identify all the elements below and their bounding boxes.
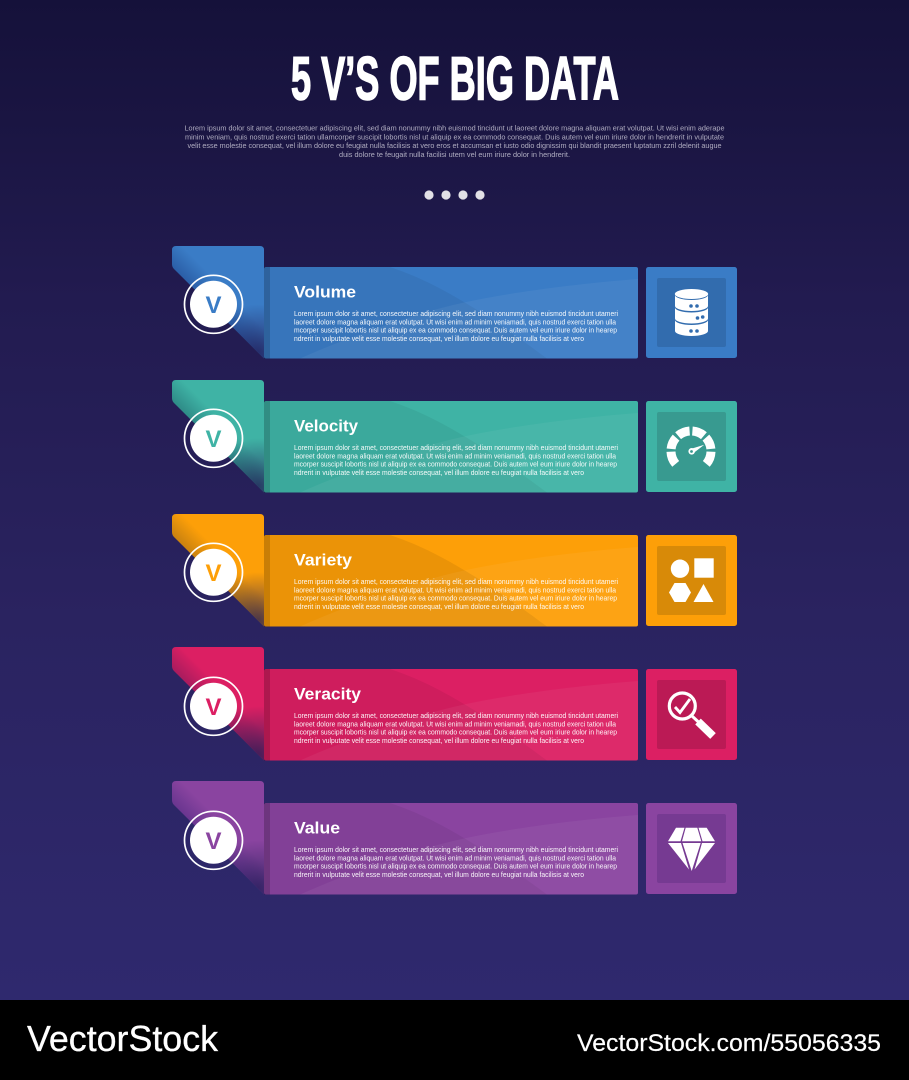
icon: magnifier with check bbox=[669, 693, 713, 736]
badge: V bbox=[205, 828, 222, 855]
body text: laoreet dolore magna aliquam erat volutpat. Ut wisi enim ad minim veniamadi, quis nostrud exerci tation ulla bbox=[294, 318, 616, 326]
icon: speedometer bbox=[671, 431, 711, 464]
panel: Volume bbox=[172, 246, 737, 358]
panel: Veracity bbox=[172, 647, 737, 760]
body text: laoreet dolore magna aliquam erat volutpat. Ut wisi enim ad minim veniamadi, quis nostrud exerci tation ulla bbox=[294, 854, 616, 862]
content band bbox=[264, 267, 638, 358]
intro text: Lorem ipsum dolor sit amet, consectetuer adipiscing elit, sed diam nonummy nibh euismod tincidunt ut laoreet dolore magna aliquam erat volutpat. Ut wisi enim aderape bbox=[184, 124, 724, 132]
ribbon tab bbox=[172, 514, 264, 626]
body text: ndrerit in vulputate velit esse molestie consequat, vel illum dolore eu feugiat nulla facilisis at vero bbox=[294, 871, 584, 879]
badge bbox=[184, 543, 242, 601]
badge bbox=[184, 677, 242, 735]
body text: laoreet dolore magna aliquam erat volutpat. Ut wisi enim ad minim veniamadi, quis nostrud exerci tation ulla bbox=[294, 586, 616, 594]
heading: Veracity bbox=[294, 684, 362, 704]
body text: Lorem ipsum dolor sit amet, consectetuer adipiscing elit, sed diam nonummy nibh euismod tincidunt utameri bbox=[294, 712, 618, 720]
body text: Lorem ipsum dolor sit amet, consectetuer adipiscing elit, sed diam nonummy nibh euismod tincidunt utameri bbox=[294, 846, 618, 854]
content band bbox=[264, 535, 638, 626]
badge: V bbox=[205, 426, 222, 453]
intro text bbox=[184, 124, 724, 159]
body text: laoreet dolore magna aliquam erat volutpat. Ut wisi enim ad minim veniamadi, quis nostrud exerci tation ulla bbox=[294, 452, 616, 460]
body text: mcorper suscipit lobortis nisl ut aliquip ex ea commodo consequat. Duis autem vel eum iriure dolor in hearep bbox=[294, 327, 617, 335]
body text bbox=[294, 846, 618, 879]
body text: mcorper suscipit lobortis nisl ut aliquip ex ea commodo consequat. Duis autem vel eum iriure dolor in hearep bbox=[294, 461, 617, 469]
body text: Lorem ipsum dolor sit amet, consectetuer adipiscing elit, sed diam nonummy nibh euismod tincidunt utameri bbox=[294, 444, 618, 452]
icon box bbox=[646, 669, 737, 760]
body text bbox=[294, 444, 618, 477]
body text: laoreet dolore magna aliquam erat volutpat. Ut wisi enim ad minim veniamadi, quis nostrud exerci tation ulla bbox=[294, 720, 616, 728]
body text: ndrerit in vulputate velit esse molestie consequat, vel illum dolore eu feugiat nulla facilisis at vero bbox=[294, 469, 584, 477]
icon box bbox=[646, 803, 737, 894]
body text: ndrerit in vulputate velit esse molestie consequat, vel illum dolore eu feugiat nulla facilisis at vero bbox=[294, 603, 584, 611]
ribbon tab bbox=[172, 781, 264, 894]
icon box bbox=[646, 267, 737, 358]
body text: ndrerit in vulputate velit esse molestie consequat, vel illum dolore eu feugiat nulla facilisis at vero bbox=[294, 737, 584, 745]
ribbon tab bbox=[172, 380, 264, 492]
badge: V bbox=[205, 560, 222, 587]
panel: Variety bbox=[172, 514, 737, 626]
pagination dots bbox=[424, 190, 485, 200]
icon: shapes bbox=[669, 558, 714, 602]
body text: mcorper suscipit lobortis nisl ut aliquip ex ea commodo consequat. Duis autem vel eum iriure dolor in hearep bbox=[294, 729, 617, 737]
body text: ndrerit in vulputate velit esse molestie consequat, vel illum dolore eu feugiat nulla facilisis at vero bbox=[294, 335, 584, 343]
heading: Variety bbox=[294, 550, 353, 570]
panel: Value bbox=[172, 781, 737, 894]
badge: V bbox=[205, 694, 222, 721]
heading: Velocity bbox=[294, 416, 359, 436]
watermark footer bbox=[0, 1000, 909, 1080]
badge bbox=[184, 409, 242, 467]
body text bbox=[294, 712, 618, 745]
heading: Volume bbox=[294, 282, 356, 302]
content band bbox=[264, 803, 638, 894]
panel: Velocity bbox=[172, 380, 737, 492]
heading: Value bbox=[294, 818, 340, 838]
body text: Lorem ipsum dolor sit amet, consectetuer adipiscing elit, sed diam nonummy nibh euismod tincidunt utameri bbox=[294, 310, 618, 318]
watermark logo: VectorStock bbox=[27, 1018, 219, 1059]
body text: mcorper suscipit lobortis nisl ut aliquip ex ea commodo consequat. Duis autem vel eum iriure dolor in hearep bbox=[294, 863, 617, 871]
intro text: minim veniam, quis nostrud exerci tation ullamcorper suscipit lobortis nisl ut aliquip ex ea commodo consequat. Duis autem vel eum iriure dolor in hendrerit in vulputate bbox=[185, 132, 724, 141]
body text: Lorem ipsum dolor sit amet, consectetuer adipiscing elit, sed diam nonummy nibh euismod tincidunt utameri bbox=[294, 578, 618, 586]
ribbon tab bbox=[172, 246, 264, 358]
content band bbox=[264, 669, 638, 760]
watermark url: VectorStock.com/55056335 bbox=[577, 1030, 881, 1057]
badge: V bbox=[205, 292, 222, 319]
body text: mcorper suscipit lobortis nisl ut aliquip ex ea commodo consequat. Duis autem vel eum iriure dolor in hearep bbox=[294, 595, 617, 603]
content band bbox=[264, 401, 638, 492]
title: 5 V’S OF BIG DATA bbox=[291, 44, 619, 112]
intro text: duis dolore te feugait nulla facilisi utem vel eum iriure dolor in hendrerit. bbox=[339, 150, 570, 159]
body text bbox=[294, 578, 618, 611]
intro text: velit esse molestie consequat, vel illum dolore eu feugiat nulla facilisis at vero eros et accumsan et iusto odio dignissim qui blandit praesent luptatum zzril delenit augue bbox=[188, 141, 722, 150]
body text bbox=[294, 310, 618, 343]
badge bbox=[184, 275, 242, 333]
icon: database bbox=[675, 289, 708, 336]
icon box bbox=[646, 535, 737, 626]
icon: diamond bbox=[668, 828, 715, 871]
badge bbox=[184, 811, 242, 869]
ribbon tab bbox=[172, 647, 264, 760]
icon box bbox=[646, 401, 737, 492]
